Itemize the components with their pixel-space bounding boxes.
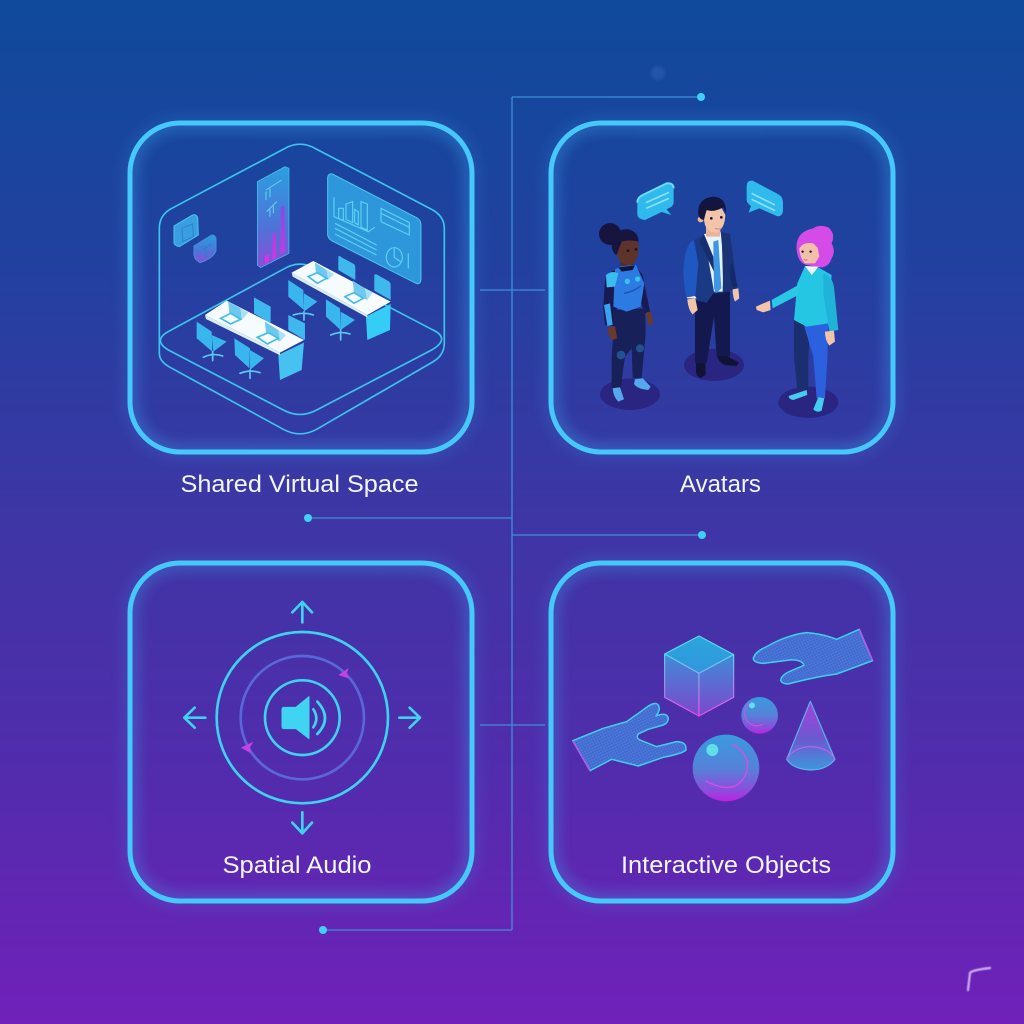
sound waves	[313, 702, 325, 734]
label: shared virtual space: Shared Virtual Space	[180, 471, 418, 498]
direction arrows	[184, 602, 420, 833]
connector lines	[304, 93, 706, 934]
middle ring	[241, 656, 364, 779]
large sphere	[693, 735, 759, 801]
panel: avatars	[551, 123, 893, 452]
wall tile one	[174, 215, 198, 247]
wall screen	[328, 174, 421, 284]
faint spot	[651, 66, 665, 80]
desk one chairs	[197, 322, 264, 378]
cube	[665, 636, 734, 716]
avatar: robotic woman	[599, 223, 660, 410]
tile glyphs	[182, 224, 212, 257]
label: avatars: Avatars	[680, 471, 761, 498]
desk two chairs	[288, 280, 355, 340]
avatars illustration	[599, 181, 838, 418]
label: interactive objects: Interactive Objects	[621, 852, 831, 879]
tall panel marks	[266, 180, 282, 217]
outer ring	[217, 632, 388, 803]
avatar: man in suit	[683, 197, 744, 381]
panel: spatial audio	[130, 563, 472, 901]
small sphere	[741, 697, 778, 734]
label: spatial audio: Spatial Audio	[222, 852, 372, 879]
interactive objects illustration	[573, 629, 873, 801]
hand lower left	[573, 703, 686, 771]
wall tile two	[194, 235, 216, 263]
room outline	[159, 144, 444, 434]
spatial audio diagram	[184, 602, 420, 833]
desk two	[292, 256, 391, 340]
screen chart and text lines	[334, 197, 409, 268]
panel: interactive objects	[551, 563, 893, 901]
speech bubble right	[747, 181, 783, 216]
avatar: woman with magenta hair	[756, 226, 838, 418]
tall panel bars	[265, 205, 285, 264]
desk one	[205, 297, 305, 380]
inner ring	[265, 680, 340, 755]
isometric office illustration	[159, 144, 444, 434]
floor outline	[160, 264, 442, 414]
speech bubble left	[637, 183, 674, 220]
magenta arrowheads	[241, 668, 349, 753]
panel: shared virtual space	[130, 123, 472, 452]
corner mark	[968, 968, 990, 990]
hand upper right	[753, 629, 873, 684]
cone	[787, 701, 835, 770]
speaker icon	[282, 697, 309, 739]
tall data panel	[257, 167, 289, 268]
